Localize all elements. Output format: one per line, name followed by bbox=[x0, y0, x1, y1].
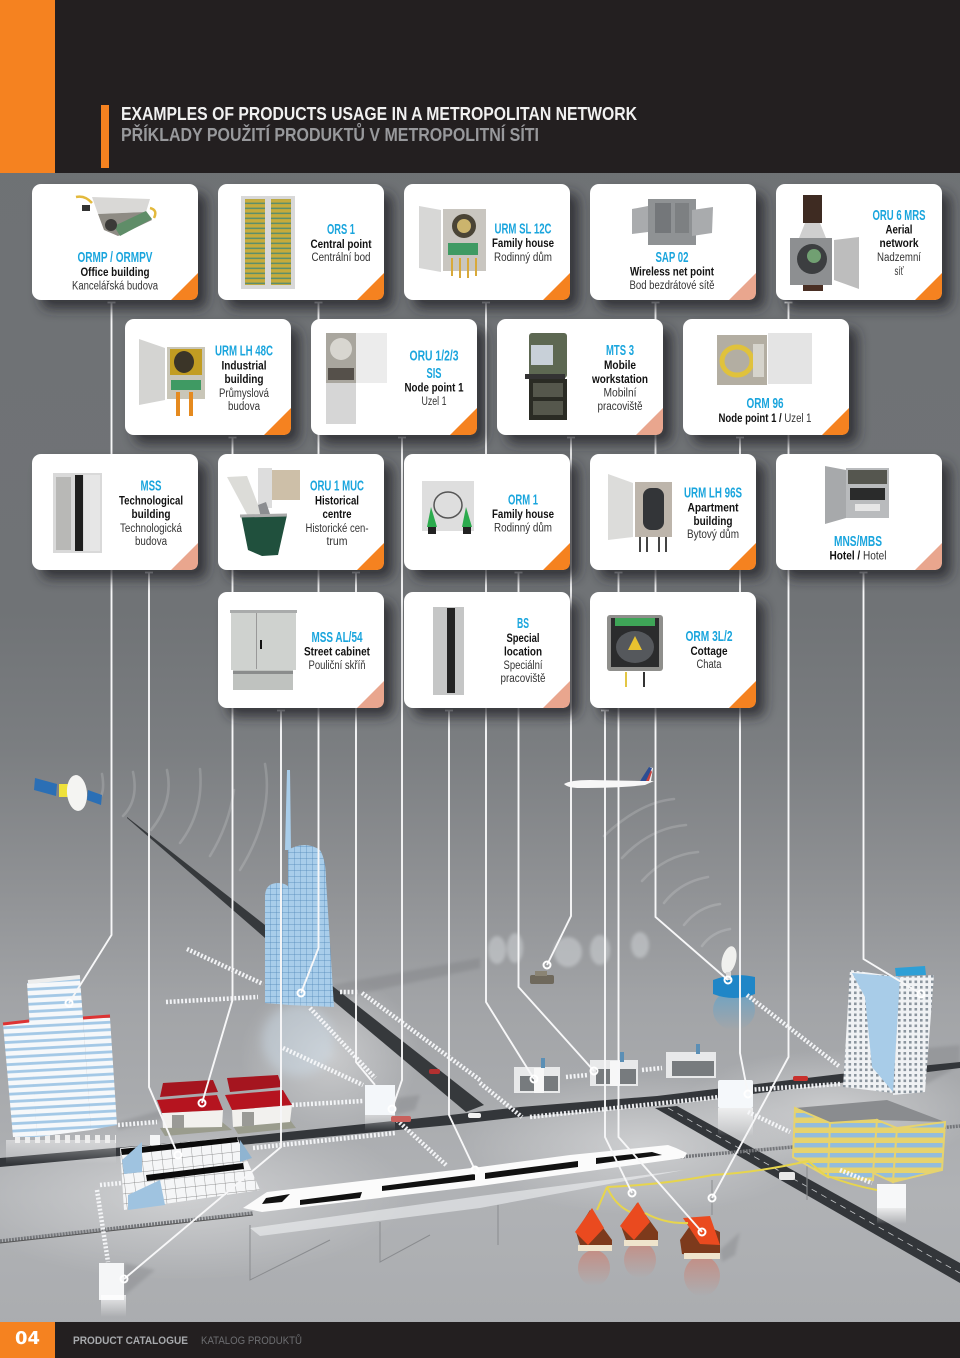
card: ORMP / ORMPV: Office building bbox=[80, 267, 150, 279]
white network boxes bbox=[99, 1080, 906, 1317]
card: BS bbox=[404, 592, 570, 708]
product photo: URM SL 12C bbox=[419, 206, 486, 278]
product photo: ORM 96 bbox=[717, 333, 812, 385]
card: URM LH 48C: building bbox=[224, 374, 264, 386]
card: ORU 6 MRS: síť bbox=[894, 266, 904, 278]
product photo: SAP 02 bbox=[632, 199, 713, 245]
connector: ORU 1 MUC bbox=[149, 572, 178, 1155]
card: MSS AL/54: MSS AL/54 bbox=[312, 629, 363, 646]
product photo: MTS 3 bbox=[525, 333, 567, 420]
card: ORS 1 bbox=[218, 184, 384, 300]
card: ORM 1: Family house bbox=[492, 509, 554, 521]
card: SAP 02: Bod bezdrátové sítě bbox=[630, 280, 714, 292]
card: URM LH 96S bbox=[590, 454, 756, 570]
card: URM LH 48C: Průmyslová bbox=[219, 388, 269, 400]
card: MNS/MBS bbox=[776, 454, 942, 570]
card: ORU 1 MUC: trum bbox=[326, 536, 348, 548]
card: ORU 1/2/3 SIS bbox=[311, 319, 477, 435]
card: ORMP / ORMPV: Kancelářská budova bbox=[72, 280, 158, 292]
card: ORM 3L/2: ORM 3L/2 bbox=[686, 628, 732, 645]
card: ORM 96: ORM 96 bbox=[746, 395, 784, 412]
product photo: URM LH 96S bbox=[608, 474, 672, 552]
card: ORS 1: Central point bbox=[310, 239, 372, 251]
card: ORU 6 MRS: network bbox=[880, 238, 919, 250]
connector: MSS AL/54 bbox=[124, 710, 281, 1279]
cars bbox=[391, 1069, 808, 1180]
card: BS: BS bbox=[517, 615, 529, 632]
card: URM LH 48C: Industrial bbox=[222, 360, 266, 372]
card: MTS 3: workstation bbox=[591, 374, 648, 386]
card: ORU 6 MRS: Aerial bbox=[886, 224, 912, 236]
card: URM SL 12C: URM SL 12C bbox=[494, 220, 552, 238]
card: ORU 1 MUC: centre bbox=[322, 509, 352, 521]
card: ORU 1/2/3 SIS: Uzel 1 bbox=[422, 396, 446, 408]
product photo: ORU 6 MRS bbox=[790, 195, 859, 291]
icon: satellite bbox=[34, 774, 102, 812]
vehicle: military truck bbox=[530, 971, 554, 984]
product photo: MSS AL/54 bbox=[230, 610, 297, 690]
card: ORU 6 MRS bbox=[776, 184, 942, 300]
card: ORM 3L/2: Cottage bbox=[690, 646, 728, 658]
connector: BS bbox=[449, 710, 475, 1170]
card: MSS: MSS bbox=[140, 478, 162, 495]
connector: SAP 02 bbox=[656, 302, 728, 980]
card: URM LH 48C bbox=[125, 319, 291, 435]
card: BS: location bbox=[504, 646, 542, 658]
card: ORU 1 MUC: ORU 1 MUC bbox=[310, 478, 364, 495]
satellite dish station bbox=[713, 945, 755, 1030]
page number: 04 bbox=[15, 1328, 40, 1349]
card: URM LH 48C: budova bbox=[228, 401, 261, 413]
card: MSS bbox=[32, 454, 198, 570]
road: horizontal bbox=[0, 1062, 960, 1167]
card: ORU 6 MRS: Nadzemní bbox=[877, 252, 922, 264]
card: ORM 96 bbox=[683, 319, 849, 435]
product photo: ORM 1 bbox=[422, 481, 474, 534]
heading: Czech: PŘÍKLADY POUŽITÍ PRODUKTŮ V METROPOLITNÍ SÍTI bbox=[121, 123, 539, 145]
footer label: English: PRODUCT CATALOGUE bbox=[73, 1335, 188, 1347]
card: MTS 3 bbox=[497, 319, 663, 435]
connector: ORM 1 bbox=[518, 572, 594, 1071]
connector: URM LH 96S bbox=[618, 572, 702, 1232]
card: SAP 02: Wireless net point bbox=[630, 266, 714, 278]
card: MTS 3: Mobile bbox=[604, 360, 636, 372]
glass tower bbox=[262, 770, 334, 1076]
product photo: ORU 1/2/3 bbox=[326, 333, 387, 424]
product photo: MSS bbox=[53, 473, 102, 553]
card: ORU 1/2/3 SIS: Node point 1 bbox=[404, 382, 464, 394]
data link arrows bbox=[97, 949, 872, 1262]
card: ORMP / ORMPV bbox=[32, 184, 198, 300]
card: URM LH 96S: Apartment bbox=[688, 502, 739, 514]
city scene illustration bbox=[0, 764, 960, 1317]
connector: ORM 3L/2 bbox=[605, 710, 632, 1193]
card: ORM 1: ORM 1 bbox=[508, 491, 538, 508]
product photo: ORM 3L/2 bbox=[607, 615, 663, 687]
connector: ORU 6 MRS bbox=[712, 302, 788, 1198]
card: MNS/MBS: Hotel / Hotel bbox=[830, 550, 886, 562]
connector lines with end rings bbox=[66, 302, 924, 1282]
product photo: MNS/MBS bbox=[825, 466, 889, 524]
header band bbox=[0, 0, 960, 173]
card: MSS AL/54 bbox=[218, 592, 384, 708]
card: MSS: Technological bbox=[119, 496, 183, 508]
product photo: URM LH 48C bbox=[139, 339, 205, 416]
train bbox=[243, 1145, 687, 1236]
card: ORS 1: Centrální bod bbox=[312, 252, 370, 264]
yellow apartment building bbox=[793, 1100, 945, 1182]
yellow cable bbox=[597, 1161, 877, 1223]
T caps and rings bbox=[66, 302, 924, 1282]
signal waves from satellite bbox=[100, 764, 267, 870]
card: URM LH 96S: building bbox=[694, 516, 732, 528]
connector: ORS 1 bbox=[392, 437, 402, 1109]
card: ORS 1: ORS 1 bbox=[327, 221, 355, 238]
card: ORU 1/2/3 SIS: SIS bbox=[426, 365, 442, 382]
connector: MTS 3 bbox=[547, 437, 571, 965]
card: URM LH 96S: URM LH 96S bbox=[684, 484, 742, 501]
card: URM SL 12C: Family house bbox=[492, 238, 554, 250]
card: BS: Speciální bbox=[504, 660, 543, 672]
card: MSS: budova bbox=[135, 536, 168, 548]
card: ORM 1 bbox=[404, 454, 570, 570]
product photo: ORS 1 bbox=[241, 196, 295, 289]
data centre building bbox=[120, 1135, 260, 1210]
card: URM SL 12C: Rodinný dům bbox=[494, 252, 552, 264]
card: ORM 3L/2: Chata bbox=[696, 659, 722, 671]
footer label: Czech: KATALOG PRODUKTŮ bbox=[201, 1334, 302, 1347]
warehouses with red roofs bbox=[157, 1075, 296, 1136]
card: BS: pracoviště bbox=[500, 673, 546, 685]
card: ORM 96: Node point 1 / Uzel 1 bbox=[718, 413, 812, 425]
trees bbox=[488, 932, 649, 967]
connector: ORM 96 bbox=[740, 437, 748, 1094]
product photo: BS bbox=[433, 607, 464, 695]
road: diagonal upper bbox=[127, 817, 265, 938]
heading: English: EXAMPLES OF PRODUCTS USAGE IN A METROPOLITAN NETWORK bbox=[121, 104, 637, 124]
card: MNS/MBS: MNS/MBS bbox=[834, 533, 882, 550]
card: MTS 3: pracoviště bbox=[598, 401, 642, 413]
connector: ORU 1/2/3 bbox=[356, 572, 375, 1085]
card: URM LH 48C: URM LH 48C bbox=[215, 343, 273, 360]
card: ORMP / ORMPV: ORMP / ORMPV bbox=[78, 249, 152, 266]
card: SAP 02 bbox=[590, 184, 756, 300]
connector: MNS/MBS bbox=[864, 572, 921, 994]
card: ORM 3L/2 bbox=[590, 592, 756, 708]
card: BS: Special bbox=[506, 633, 540, 645]
connector: ORMP bbox=[301, 302, 318, 993]
card: ORU 6 MRS: ORU 6 MRS bbox=[872, 207, 926, 224]
card: MTS 3: MTS 3 bbox=[606, 342, 634, 359]
connector: MSS bbox=[69, 302, 112, 1003]
card: URM SL 12C bbox=[404, 184, 570, 300]
red cottage houses bbox=[575, 1202, 720, 1296]
office towers bbox=[3, 977, 117, 1164]
card: ORU 1 MUC: Historical bbox=[315, 496, 359, 508]
product photo: ORU 1 MUC bbox=[227, 468, 300, 556]
card: ORU 1 MUC bbox=[218, 454, 384, 570]
connector: URM LH 48C bbox=[202, 437, 232, 1103]
card: MSS: Technologická bbox=[120, 523, 183, 535]
hotel tower bbox=[843, 966, 934, 1095]
footer band bbox=[0, 1322, 960, 1358]
connector: URM SL 12C bbox=[486, 302, 534, 1079]
card: MTS 3: Mobilní bbox=[604, 388, 637, 400]
long shadows on the floor bbox=[118, 958, 960, 1296]
railway track bbox=[0, 1126, 960, 1243]
road: diagonal lower bbox=[655, 1106, 960, 1283]
product photo: ORMP bbox=[76, 197, 155, 236]
card: SAP 02: SAP 02 bbox=[656, 249, 688, 266]
card: ORU 1/2/3 SIS: ORU 1/2/3 bbox=[410, 348, 458, 365]
modern family houses bbox=[514, 1044, 716, 1093]
card: MSS AL/54: Street cabinet bbox=[304, 646, 370, 658]
card: ORU 1 MUC: Historické cen- bbox=[306, 523, 369, 535]
card: URM LH 96S: Bytový dům bbox=[687, 529, 739, 541]
icon: airplane bbox=[564, 767, 654, 788]
signal waves from dish bbox=[604, 799, 730, 946]
card: ORM 1: Rodinný dům bbox=[494, 522, 552, 534]
card: MSS AL/54: Pouliční skříň bbox=[308, 660, 366, 672]
card: MSS: building bbox=[132, 509, 170, 521]
utility poles bbox=[250, 1160, 807, 1280]
